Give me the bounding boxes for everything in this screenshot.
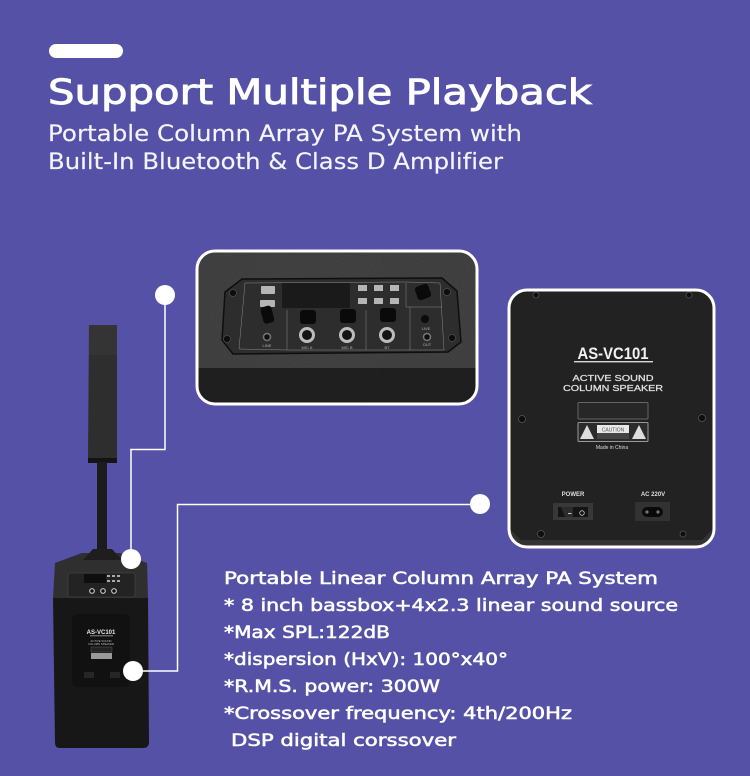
bass box: COLUMN SPEAKER	[88, 642, 114, 646]
panel: rear plate photo: COLUMN SPEAKER	[563, 383, 663, 393]
specification text: *Max SPL:122dB	[224, 623, 390, 642]
panel: control plate photo	[197, 251, 477, 404]
subtitle: Built-In Bluetooth & Class D Amplifier	[48, 150, 504, 175]
panel: rear plate photo	[509, 290, 714, 547]
bass box: ACTIVE SOUND	[91, 639, 111, 643]
panel: control plate photo: BT	[384, 345, 390, 350]
bass box	[53, 549, 149, 748]
connector: rear plate callout	[123, 494, 490, 681]
panel: control plate photo: MIC A	[302, 345, 313, 350]
heading accent pill	[49, 44, 123, 58]
subtitle	[48, 122, 522, 175]
title: Support Multiple Playback	[48, 73, 593, 113]
panel: rear plate photo: POWER	[562, 492, 585, 498]
panel: rear plate photo: AS-VC101	[578, 345, 648, 363]
column array	[88, 325, 117, 463]
specification text: * 8 inch bassbox+4x2.3 linear sound source	[224, 596, 678, 615]
specification text: *Crossover frequency: 4th/200Hz	[224, 704, 572, 723]
subtitle: Portable Column Array PA System with	[48, 122, 522, 147]
panel: control plate photo: LINE	[263, 343, 272, 348]
specification text: *R.M.S. power: 300W	[224, 677, 440, 696]
panel: control plate photo: OUT	[423, 342, 432, 347]
specification text: DSP digital corssover	[231, 731, 456, 750]
specification text	[224, 569, 678, 750]
specification text: Portable Linear Column Array PA System	[224, 569, 658, 588]
product: column speaker	[53, 325, 149, 748]
panel: rear plate photo: Made in China	[596, 445, 628, 451]
panel: rear plate photo: CAUTION	[602, 428, 625, 434]
panel: rear plate photo: ACTIVE SOUND	[572, 373, 654, 383]
panel: control plate photo: LIVE	[422, 326, 431, 331]
panel: control plate photo: MIC B	[341, 345, 353, 350]
specification text: *dispersion (HxV): 100°x40°	[224, 650, 508, 669]
pole	[97, 462, 107, 550]
panel: rear plate photo: AC 220V	[641, 492, 665, 498]
connector: control plate callout	[121, 285, 175, 569]
bass box: AS-VC101	[87, 630, 116, 636]
